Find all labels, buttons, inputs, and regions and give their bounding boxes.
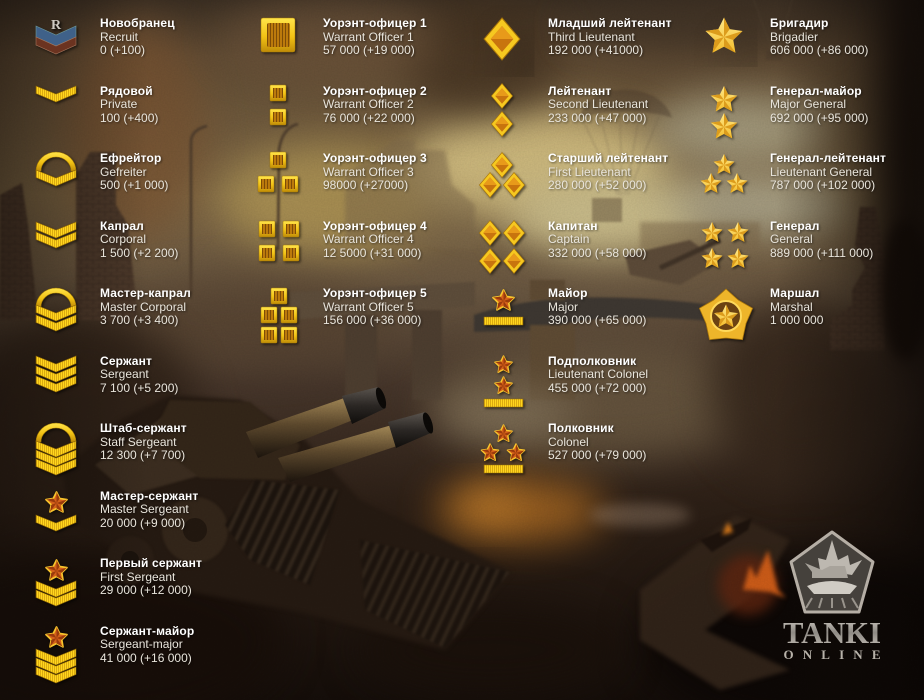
rank: Corporal: Капрал <box>100 219 144 233</box>
rank: Captain: 332 000 (+58 000) <box>548 246 646 260</box>
wordmark: ONLINE <box>784 647 880 662</box>
rank: Warrant Officer 1: Warrant Officer 1 <box>323 30 414 44</box>
rank: Warrant Officer 2: Warrant Officer 2 <box>323 97 414 111</box>
rank: Warrant Officer 3: Warrant Officer 3 <box>323 165 414 179</box>
rank: Sergeant-major: Сержант-майор <box>100 624 194 638</box>
rank: Gefreiter: Gefreiter <box>100 165 147 179</box>
ruins right <box>830 207 924 360</box>
rank: First Sergeant: Первый сержант <box>100 556 202 570</box>
rank: Master Corporal: 3 700 (+3 400) <box>100 313 178 327</box>
rank: Private: Private <box>100 97 138 111</box>
rank: Marshal: Marshal <box>770 300 813 314</box>
rank: Recruit: Recruit <box>100 30 139 44</box>
tank <box>62 386 512 650</box>
lamp posts <box>191 124 298 295</box>
rank: Major <box>484 286 646 327</box>
rank: Major: Майор <box>548 286 588 300</box>
rank: Gefreiter: Ефрейтор <box>100 151 161 165</box>
parachutes <box>580 0 795 222</box>
rank: Master Sergeant: Master Sergeant <box>100 502 189 516</box>
rank: Lieutenant Colonel <box>484 354 648 407</box>
rank: Brigadier: Бригадир <box>770 16 829 30</box>
icon: two chevrons <box>36 222 76 248</box>
column 1: enlisted ranks <box>36 16 202 683</box>
rank: Warrant Officer 4: Warrant Officer 4 <box>323 232 414 246</box>
icon: dome and chevron <box>36 152 76 186</box>
lower smoke bands <box>0 275 890 530</box>
rank: Major General: Генерал-майор <box>770 84 862 98</box>
rank: Lieutenant General: Lieutenant General <box>770 165 872 179</box>
rank: Gefreiter: 500 (+1 000) <box>100 178 168 192</box>
rank: Captain <box>479 219 646 274</box>
rank: First Lieutenant: 280 000 (+52 000) <box>548 178 646 192</box>
rank: Colonel: Полковник <box>548 421 615 435</box>
rank: Second Lieutenant: Second Lieutenant <box>548 97 649 111</box>
rank: Corporal: 1 500 (+2 200) <box>100 246 178 260</box>
rank: Staff Sergeant: Штаб-сержант <box>100 421 187 435</box>
rank: Third Lieutenant: 192 000 (+41000) <box>548 43 643 57</box>
rank: Warrant Officer 5 <box>261 286 427 343</box>
rank: Master Sergeant: 20 000 (+9 000) <box>100 516 185 530</box>
icon: large square <box>261 18 295 52</box>
wreck with flames <box>640 515 790 690</box>
rank: Sergeant-major: Sergeant-major <box>100 637 183 651</box>
rank: Master Corporal <box>36 286 191 331</box>
rank: First Lieutenant <box>479 151 668 198</box>
icon: pentagon tank badge <box>791 532 873 612</box>
rank: Third Lieutenant <box>484 16 672 60</box>
rank: Second Lieutenant: Лейтенант <box>548 84 611 98</box>
rank: Brigadier <box>705 16 868 57</box>
battle smoke and fire <box>435 393 690 542</box>
icon: large gold star <box>705 18 743 53</box>
column 3: officers <box>479 16 672 473</box>
rank: Lieutenant General <box>701 151 886 193</box>
rank: Warrant Officer 1: 57 000 (+19 000) <box>323 43 415 57</box>
icon: four diamonds <box>479 220 525 274</box>
icon: star and chevron <box>36 492 76 531</box>
icon: star and three chevrons <box>36 627 76 683</box>
bridge <box>290 240 720 400</box>
rank: Lieutenant Colonel: 455 000 (+72 000) <box>548 381 646 395</box>
icon: three diamonds <box>479 152 525 198</box>
rank: Sergeant: Sergeant <box>100 367 149 381</box>
rank: Third Lieutenant: Third Lieutenant <box>548 30 635 44</box>
icon: two gold stars <box>711 86 737 138</box>
rank: Warrant Officer 3: 98000 (+27000) <box>323 178 408 192</box>
column 2: warrant officers <box>258 16 427 343</box>
rank: Warrant Officer 2: 76 000 (+22 000) <box>323 111 415 125</box>
rank: Warrant Officer 1: Уорэнт-офицер 1 <box>323 16 427 30</box>
rank: Lieutenant General: Генерал-лейтенант <box>770 151 886 165</box>
lower darkness and rubble <box>0 550 924 700</box>
rank: Colonel: 527 000 (+79 000) <box>548 448 646 462</box>
rank: Colonel <box>481 421 646 473</box>
icon: three stars over bar <box>481 425 525 473</box>
column 4: generals <box>699 16 886 340</box>
rank: Master Sergeant <box>36 489 198 531</box>
rank: Warrant Officer 3: Уорэнт-офицер 3 <box>323 151 427 165</box>
rank: Warrant Officer 5: Уорэнт-офицер 5 <box>323 286 427 300</box>
rank: General: Генерал <box>770 219 819 233</box>
rank: Warrant Officer 2 <box>270 84 427 125</box>
rank: Colonel: Colonel <box>548 435 589 449</box>
rank: Gefreiter <box>36 151 168 192</box>
rank: Corporal: Corporal <box>100 232 146 246</box>
rank: Captain: Captain <box>548 232 589 246</box>
rank: First Sergeant: 29 000 (+12 000) <box>100 583 192 597</box>
rank: Lieutenant Colonel: Подполковник <box>548 354 637 368</box>
rank: General: 889 000 (+111 000) <box>770 246 873 260</box>
rank: Recruit: 0 (+100) <box>100 43 145 57</box>
icon: three gold stars <box>701 154 747 193</box>
rank: Staff Sergeant: Staff Sergeant <box>100 435 177 449</box>
rank: Third Lieutenant: Младший лейтенант <box>548 16 672 30</box>
rank: Major General <box>711 84 868 138</box>
rank: Major General: Major General <box>770 97 846 111</box>
rank: Marshal: Маршал <box>770 286 819 300</box>
icon: star and two chevrons <box>36 560 76 606</box>
rank: Staff Sergeant <box>36 421 187 475</box>
rank: Marshal: 1 000 000 <box>770 313 824 327</box>
icon: one chevron <box>36 86 76 102</box>
icon: five squares <box>261 288 297 343</box>
rank: Private <box>36 84 158 125</box>
ruins left <box>0 152 138 320</box>
rank: First Lieutenant: Старший лейтенант <box>548 151 668 165</box>
rank: Captain: Капитан <box>548 219 598 233</box>
wordmark: TANKI <box>783 615 881 650</box>
rank: First Lieutenant: First Lieutenant <box>548 165 631 179</box>
rank: Private: 100 (+400) <box>100 111 158 125</box>
rank: Private: Рядовой <box>100 84 153 98</box>
rank: Warrant Officer 2: Уорэнт-офицер 2 <box>323 84 427 98</box>
rank: Sergeant: Сержант <box>100 354 152 368</box>
rank: Warrant Officer 4: Уорэнт-офицер 4 <box>323 219 427 233</box>
rank: Major: Major <box>548 300 578 314</box>
rank: Major: 390 000 (+65 000) <box>548 313 646 327</box>
icon: four squares <box>259 221 299 261</box>
rank: Warrant Officer 5: 156 000 (+36 000) <box>323 313 421 327</box>
rank: Lieutenant General: 787 000 (+102 000) <box>770 178 875 192</box>
icon: two stars over bar <box>484 356 523 407</box>
rank: Master Sergeant: Мастер-сержант <box>100 489 198 503</box>
rank: First Sergeant <box>36 556 202 606</box>
rank: Master Corporal: Master Corporal <box>100 300 186 314</box>
rank: Recruit <box>36 16 175 57</box>
rank: Second Lieutenant: 233 000 (+47 000) <box>548 111 646 125</box>
rank: Sergeant-major <box>36 624 194 683</box>
icon: recruit chevrons: R <box>51 18 62 33</box>
rank: Warrant Officer 5: Warrant Officer 5 <box>323 300 414 314</box>
rank: Major General: 692 000 (+95 000) <box>770 111 868 125</box>
icon: star over bar <box>484 290 523 325</box>
rank: General <box>702 219 873 268</box>
cannons <box>246 386 435 482</box>
icon: four gold stars <box>702 222 748 268</box>
rank: Warrant Officer 1 <box>261 16 427 57</box>
icon: two squares <box>270 85 286 125</box>
rank: Sergeant <box>36 354 178 395</box>
icon: three squares <box>258 152 298 192</box>
rank: Sergeant-major: 41 000 (+16 000) <box>100 651 192 665</box>
rank: Second Lieutenant <box>491 84 649 136</box>
rank: Warrant Officer 4: 12 5000 (+31 000) <box>323 246 421 260</box>
icon: large diamond <box>484 18 520 60</box>
rank: Warrant Officer 4 <box>259 219 427 261</box>
icon: dome and two chevrons <box>36 288 76 331</box>
rank: General: General <box>770 232 813 246</box>
far skyline <box>345 140 760 250</box>
rank: Brigadier: Brigadier <box>770 30 818 44</box>
rank: Master Corporal: Мастер-капрал <box>100 286 191 300</box>
rank: Corporal <box>36 219 178 260</box>
rank: Marshal <box>699 286 824 340</box>
rank: First Sergeant: First Sergeant <box>100 570 176 584</box>
icon: dome and three chevrons <box>36 423 76 475</box>
rank: Lieutenant Colonel: Lieutenant Colonel <box>548 367 648 381</box>
rank: Warrant Officer 3 <box>258 151 427 192</box>
rank: Recruit: Новобранец <box>100 16 175 30</box>
icon: two diamonds <box>491 84 513 136</box>
icon: three chevrons <box>36 356 76 392</box>
logo: Tanki Online <box>783 532 881 662</box>
icon: marshal emblem <box>699 289 753 340</box>
rank: Staff Sergeant: 12 300 (+7 700) <box>100 448 185 462</box>
rank: Sergeant: 7 100 (+5 200) <box>100 381 178 395</box>
rank: Brigadier: 606 000 (+86 000) <box>770 43 868 57</box>
